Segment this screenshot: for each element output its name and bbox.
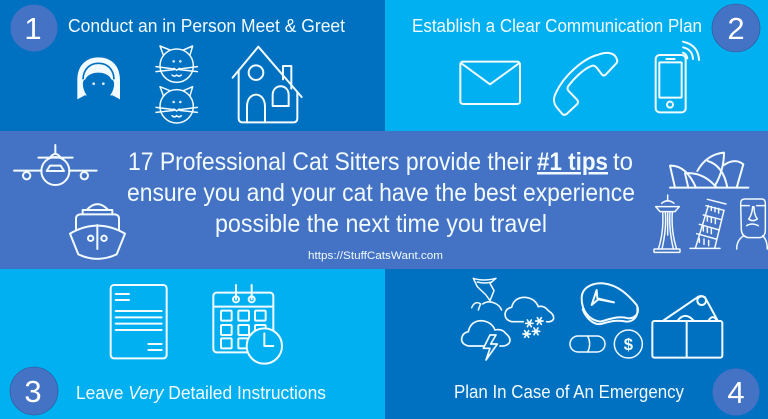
icon: lightning cloud bbox=[462, 321, 510, 360]
badge 3: 3 bbox=[24, 374, 42, 409]
icon: opera house bbox=[670, 153, 748, 188]
icon: document bbox=[111, 285, 167, 358]
badge 1: 1 bbox=[24, 11, 42, 46]
panel 1 background bbox=[0, 0, 385, 131]
panel 3 background bbox=[0, 269, 385, 419]
panel 4 background bbox=[385, 269, 768, 419]
icon: leaning tower bbox=[690, 199, 726, 248]
icon: cat bottom bbox=[156, 87, 197, 123]
badge 2 bbox=[712, 4, 760, 52]
icon: dollar coin bbox=[614, 330, 642, 358]
url: https://StuffCatsWant.com bbox=[308, 250, 443, 262]
panel 2 background bbox=[385, 0, 768, 131]
badge 3 bbox=[10, 367, 58, 415]
banner text: #1 tips bbox=[537, 148, 608, 176]
icon: wallet bbox=[652, 296, 722, 358]
icon: dollar coin: $ bbox=[624, 335, 634, 354]
icon: telephone bbox=[554, 53, 617, 115]
badge 2: 2 bbox=[727, 11, 745, 46]
banner text: possible the next time you travel bbox=[215, 210, 547, 238]
icon: ship bbox=[70, 204, 125, 259]
icon: tornado bbox=[472, 278, 502, 310]
icon: calendar with clock bbox=[213, 285, 282, 364]
central banner background bbox=[0, 131, 768, 269]
badge 4: 4 bbox=[727, 375, 745, 410]
icon: house bbox=[233, 47, 302, 122]
icon: pill bbox=[570, 336, 605, 352]
icon: person bbox=[77, 57, 120, 101]
icon: steak bbox=[582, 283, 638, 324]
icon: cat top bbox=[156, 46, 197, 82]
badge 1 bbox=[10, 4, 58, 52]
icon: airplane bbox=[14, 145, 97, 185]
icon: space needle bbox=[654, 195, 680, 252]
heading 3: Leave Very Detailed Instructions bbox=[76, 383, 326, 403]
banner text bbox=[127, 148, 635, 238]
heading 1: Conduct an in Person Meet & Greet bbox=[68, 16, 345, 36]
icon: snow cloud bbox=[505, 297, 554, 337]
icon: envelope bbox=[460, 62, 520, 104]
icon: moai bbox=[737, 199, 767, 249]
heading 4: Plan In Case of An Emergency bbox=[454, 382, 684, 402]
banner text: 17 Professional Cat Sitters provide their bbox=[128, 148, 532, 176]
banner text: ensure you and your cat have the best experience bbox=[127, 179, 635, 207]
icon: smartphone bbox=[656, 42, 699, 112]
banner text: to bbox=[613, 148, 633, 176]
heading 2: Establish a Clear Communication Plan bbox=[412, 16, 702, 36]
badge 4 bbox=[712, 368, 760, 416]
